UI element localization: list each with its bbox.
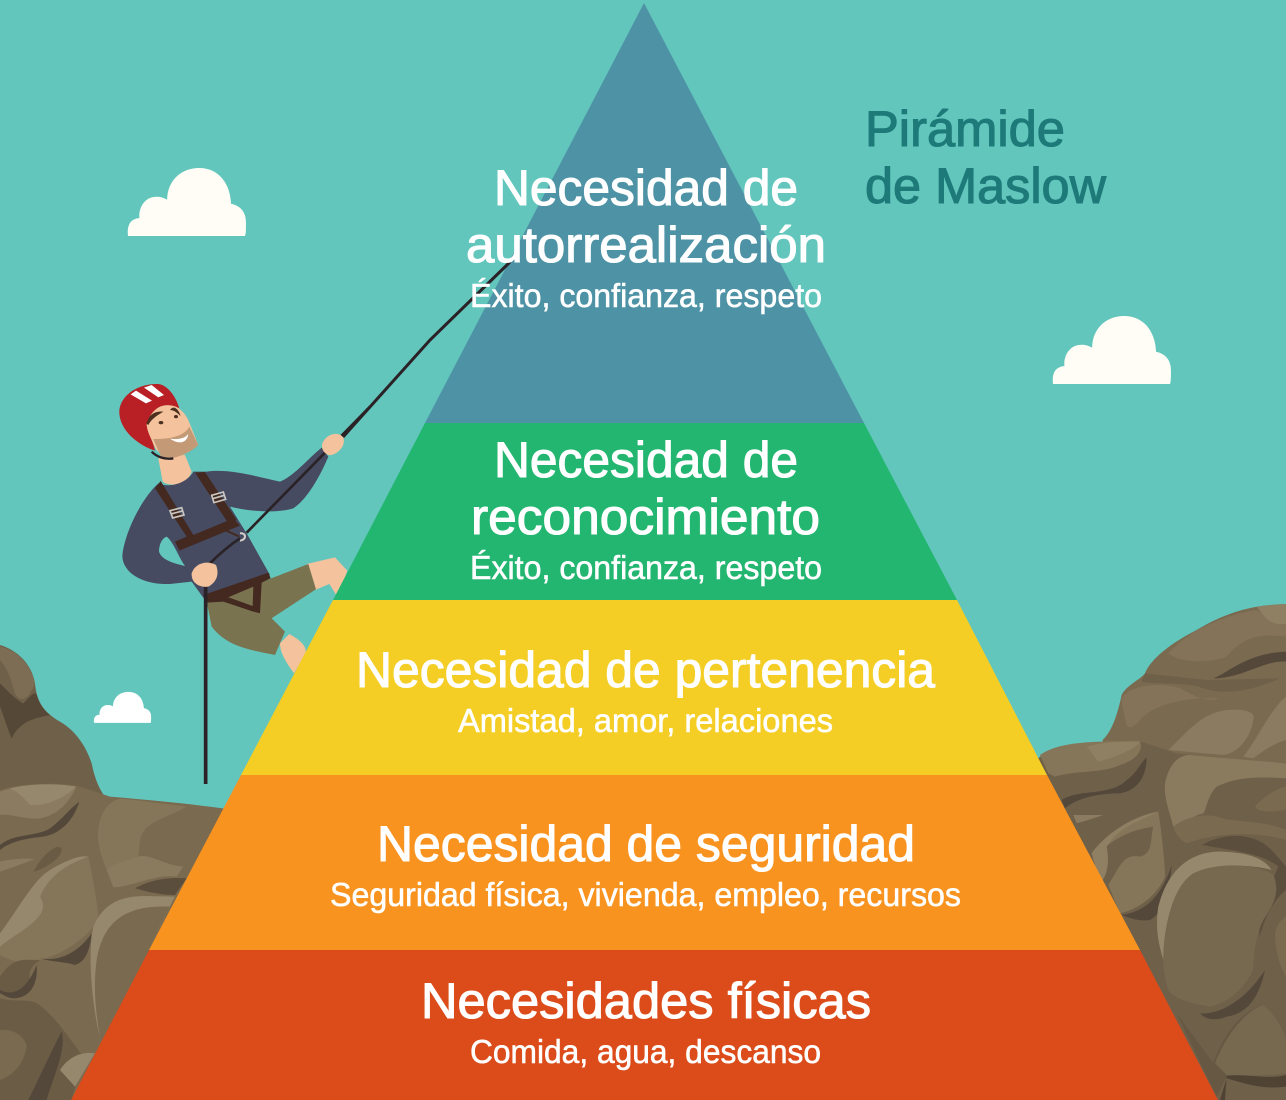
- middle boulder: [98, 799, 187, 870]
- climber: [119, 384, 370, 784]
- brows and eyes: [146, 408, 181, 425]
- right rocks: [1030, 604, 1286, 1100]
- tier: autorrealización: [425, 3, 864, 423]
- label: físicas: Comida, agua, descanso: [470, 1033, 821, 1070]
- label: pertenencia: [356, 642, 935, 739]
- tier: físicas: [71, 950, 1218, 1100]
- beard: [153, 427, 198, 459]
- cloud small: [94, 692, 151, 723]
- head: [143, 404, 198, 457]
- label: seguridad: Necesidad de seguridad: [377, 816, 915, 872]
- label: seguridad: [330, 816, 961, 913]
- cloud right: [1053, 316, 1171, 384]
- rope to carabiner: [210, 407, 370, 563]
- label: pertenencia: Necesidad de pertenencia: [356, 642, 935, 698]
- left rock facets: [0, 784, 187, 1100]
- left rocks: [0, 645, 230, 1100]
- lower mass: [0, 998, 83, 1100]
- left boulder: [0, 856, 98, 962]
- carabiner: [240, 533, 245, 541]
- climbing rope: [343, 262, 510, 437]
- label: reconocimiento: Necesidad de: [494, 432, 798, 488]
- label: autorrealización: Éxito, confianza, respeto: [470, 277, 822, 314]
- harness straps: [155, 472, 240, 551]
- right front rock: [1030, 741, 1286, 1100]
- title line 1: Pirámide: [865, 101, 1065, 157]
- label: seguridad: Seguridad física, vivienda, empleo, recursos: [330, 876, 961, 913]
- lower left crack: [40, 933, 92, 965]
- neck: [158, 455, 192, 485]
- label: autorrealización: Necesidad de: [494, 160, 798, 216]
- torso and arms: [122, 448, 328, 600]
- top highlight: [0, 784, 76, 819]
- label: pertenencia: Amistad, amor, relaciones: [458, 702, 833, 739]
- right back rock facets: [1122, 604, 1286, 758]
- cloud top left: [128, 168, 246, 236]
- left front rock: [0, 784, 230, 1100]
- dark gap: [135, 878, 187, 895]
- label: reconocimiento: reconocimiento: [471, 489, 820, 545]
- label: físicas: [421, 973, 871, 1070]
- left back rock: [0, 645, 105, 797]
- label: físicas: Necesidades físicas: [421, 973, 871, 1029]
- title: [865, 101, 1107, 214]
- tier: seguridad: [149, 775, 1140, 950]
- left back rock highlight: [0, 647, 35, 699]
- round boulder: [91, 896, 175, 1037]
- smile: [170, 434, 188, 442]
- crack: [0, 802, 79, 850]
- lanyard: [225, 530, 239, 537]
- lower hand: [192, 563, 218, 587]
- harness waist belt: [203, 573, 271, 613]
- label: reconocimiento: [470, 432, 822, 586]
- label: reconocimiento: Éxito, confianza, respeto: [470, 549, 822, 586]
- helmet stripes: [131, 385, 164, 403]
- upper foot: [307, 557, 347, 598]
- helmet: [119, 384, 179, 451]
- title line 2: de Maslow: [865, 158, 1107, 214]
- right back rock: [1103, 604, 1286, 773]
- shorts: [207, 564, 316, 655]
- left back rock shadow: [0, 683, 50, 738]
- chin strap: [152, 452, 173, 459]
- tier: pertenencia: [241, 600, 1047, 775]
- lower foot: [280, 634, 306, 673]
- upper hand: [322, 434, 344, 455]
- right front rock facets: [1040, 741, 1286, 1100]
- armpit gap: [159, 537, 185, 566]
- label: autorrealización: autorrealización: [466, 217, 826, 273]
- vertical rope: [200, 587, 211, 784]
- buckles: [170, 492, 226, 518]
- label: autorrealización: [466, 160, 826, 314]
- tier: reconocimiento: [333, 423, 957, 600]
